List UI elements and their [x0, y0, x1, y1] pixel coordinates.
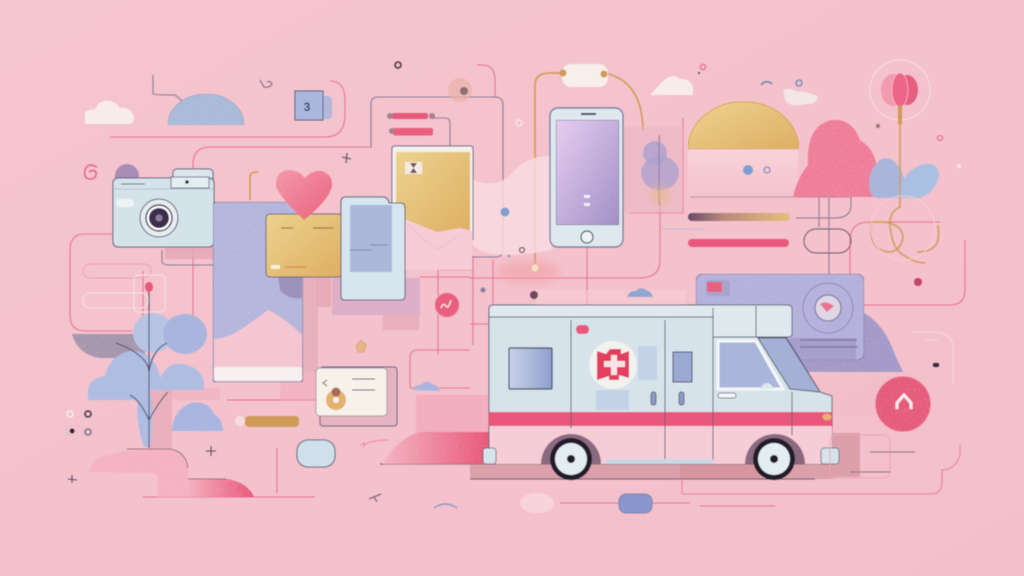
brown pill bar — [235, 416, 299, 427]
gradient progress bar — [688, 213, 790, 221]
gold pill connector node — [531, 64, 608, 272]
light panels — [638, 346, 657, 380]
dark baseline ticks — [850, 452, 915, 472]
front wheel — [745, 434, 805, 480]
left text frames — [83, 264, 165, 312]
icon: flower balloon — [870, 60, 935, 260]
blue leaves — [869, 158, 939, 198]
blue pill — [619, 494, 652, 513]
faint right-side panels — [830, 332, 953, 478]
circuit lines: dark connectors — [153, 75, 851, 299]
red tag — [576, 325, 589, 334]
side window — [673, 352, 692, 382]
card: light blue photo — [341, 197, 405, 300]
tree branches — [116, 288, 168, 448]
purple ground blob left — [72, 334, 145, 358]
cloud: top right — [783, 89, 818, 105]
red progress bar — [688, 239, 789, 247]
circuit lines: red connectors — [70, 65, 965, 506]
tree bud — [145, 282, 153, 292]
line accent — [662, 228, 705, 230]
small pink pills — [387, 113, 435, 136]
frame: rear gold photo — [392, 146, 473, 270]
bumpers — [483, 448, 496, 464]
calendar tile — [295, 91, 332, 120]
soft pink backdrop shapes — [150, 127, 920, 450]
purple blob behind camera — [115, 164, 139, 188]
icon: smartphone — [550, 108, 623, 247]
plus mark — [206, 446, 216, 456]
ring cluster — [65, 411, 91, 435]
small tilted mark — [369, 494, 381, 502]
card: gold — [266, 214, 343, 277]
ambulance body — [489, 317, 832, 464]
dome: blue — [168, 94, 244, 125]
arc mark — [434, 504, 457, 508]
ground strip — [380, 433, 860, 479]
artwork — [65, 60, 965, 513]
cab window — [718, 341, 783, 389]
small mark: check tick — [260, 80, 272, 87]
window bump — [761, 383, 773, 389]
small dark pill — [933, 363, 939, 367]
panel: lavender photo card — [213, 202, 303, 382]
spiral icon — [85, 165, 97, 179]
gold stem and loops — [871, 110, 938, 263]
roof band — [489, 305, 792, 337]
tiny cloud: blue — [627, 288, 653, 297]
rear wheel — [541, 434, 601, 480]
pink mound: ambulance rear — [383, 432, 489, 464]
star mark — [68, 475, 77, 483]
cross mark — [342, 153, 351, 163]
lower pink panel — [490, 426, 832, 464]
panel: lavender card — [696, 274, 903, 372]
pink ground mound left — [89, 449, 254, 497]
card: note with stamp — [316, 367, 397, 426]
headlight — [822, 414, 832, 420]
cab handle — [718, 393, 736, 398]
outlined pill — [804, 229, 851, 253]
calendar tile: 3 — [304, 100, 311, 114]
rear window — [509, 348, 552, 389]
button: red home — [875, 376, 931, 432]
button: red circular glyph — [434, 292, 460, 318]
left blue tree — [88, 282, 207, 448]
dome: gold — [688, 102, 799, 149]
faded purple tree — [641, 135, 679, 205]
ambulance — [483, 305, 839, 480]
tiny blue cloud lower — [412, 382, 440, 391]
small ring: top — [395, 62, 401, 68]
rounded blue capsule — [297, 440, 335, 467]
cloud: top center — [650, 76, 693, 95]
gold connector line — [250, 73, 643, 268]
pink tree foliage — [793, 120, 877, 197]
icon: camera — [113, 169, 214, 247]
small gold charm — [356, 340, 366, 352]
icon: heart — [276, 170, 332, 220]
blue bush — [172, 402, 223, 431]
medical cross emblem — [589, 341, 637, 389]
windshield — [758, 338, 820, 392]
red stripe — [489, 412, 832, 426]
door handles — [651, 392, 656, 405]
cloud: top left — [85, 101, 134, 124]
pink blob bottom — [520, 493, 554, 513]
door seams — [571, 306, 792, 460]
dots and rings: mid area — [448, 64, 961, 299]
